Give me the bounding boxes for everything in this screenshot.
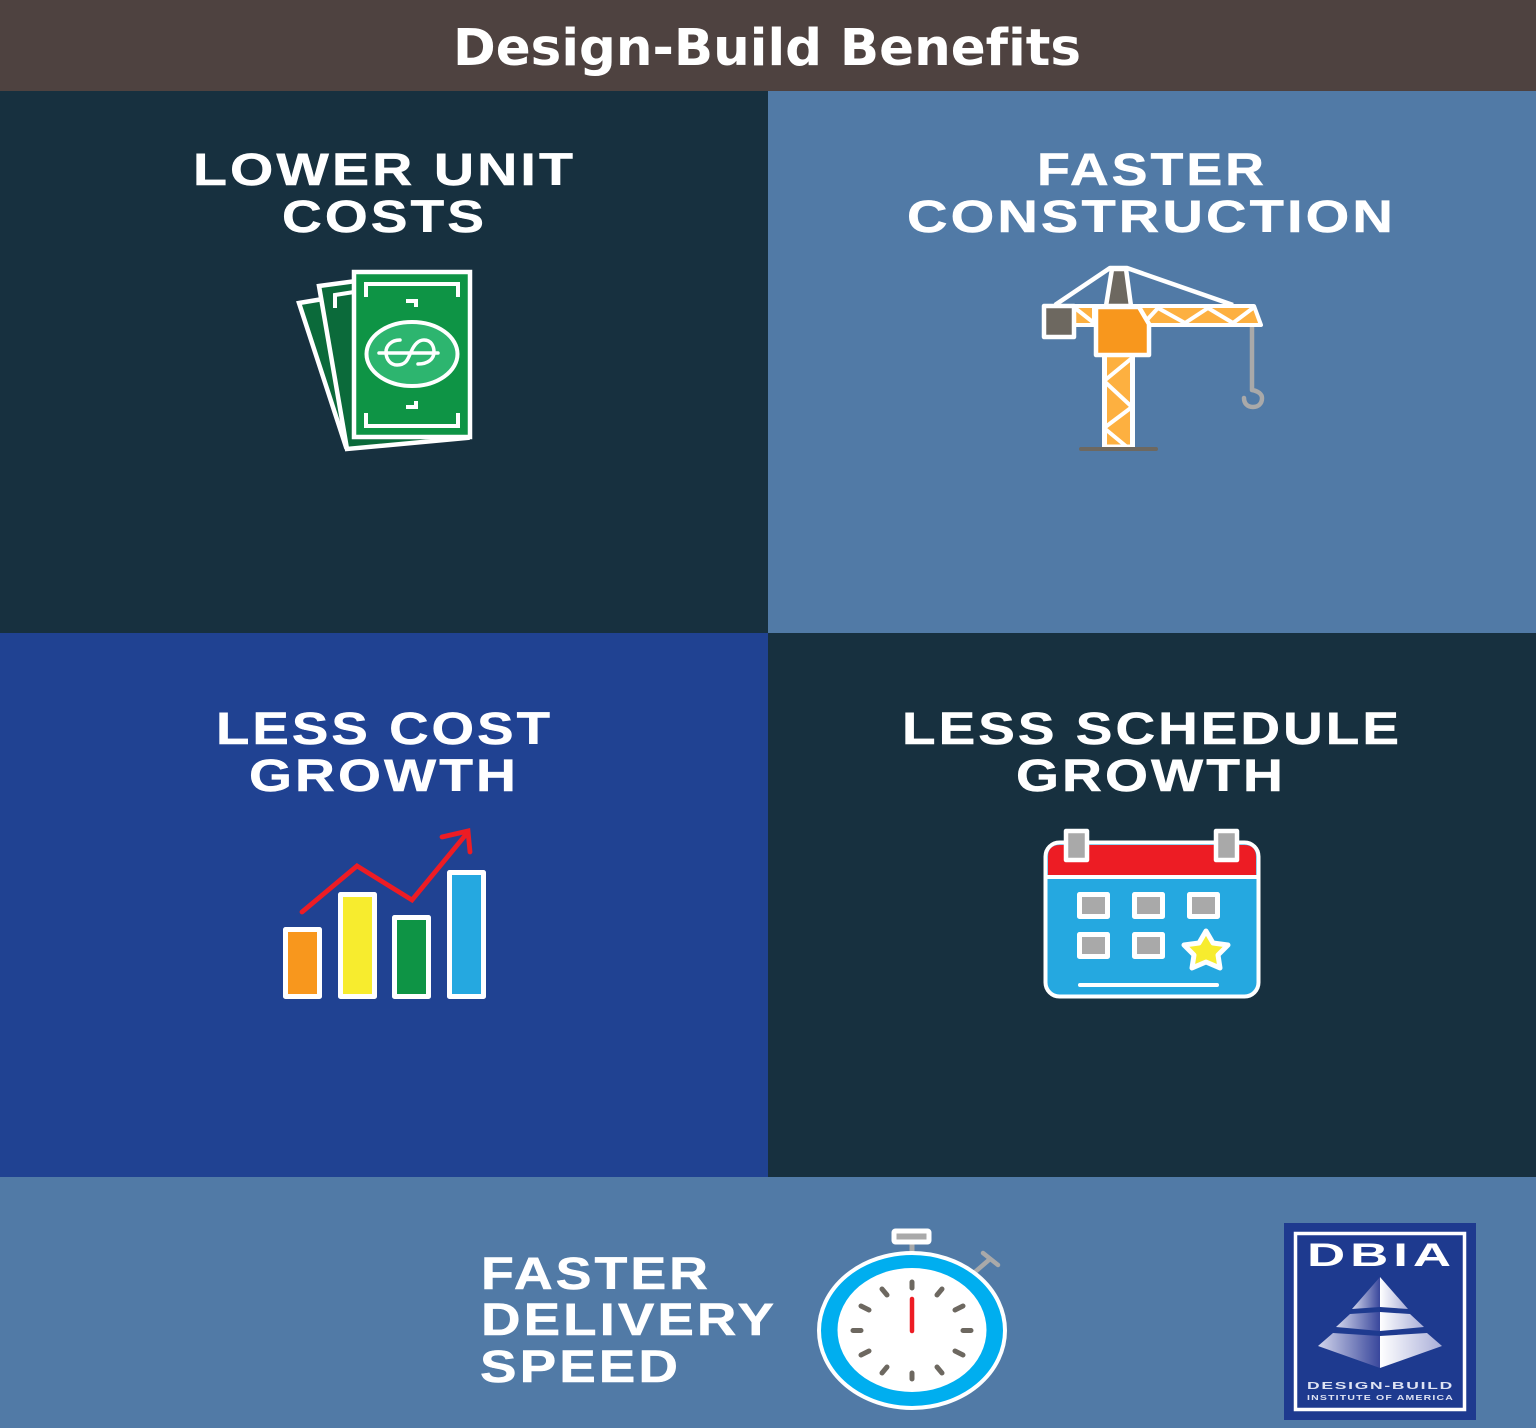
heading: less cost growth: GROWTH [249,750,519,801]
icon: calendar with star [1045,831,1259,996]
heading: lower unit costs [193,144,576,242]
panel: less schedule growth [768,633,1536,1177]
heading: less cost growth [216,703,553,801]
heading: lower unit costs: LOWER UNIT [193,144,576,195]
logo pyramid [1318,1277,1442,1368]
icon: rising bar chart [286,831,484,996]
title banner [0,0,1536,91]
heading: faster delivery speed [480,1248,777,1392]
panel: lower unit costs [0,91,768,633]
icon: tower crane [1044,268,1262,451]
heading: lower unit costs: COSTS [282,191,487,242]
logo name: DESIGN-BUILD [1307,1381,1454,1392]
heading: less schedule growth: LESS SCHEDULE [902,703,1402,754]
icon: stack of dollar bills [299,272,470,449]
panel: faster construction [768,91,1536,633]
heading: faster delivery speed: SPEED [480,1341,681,1392]
logo subtitle: INSTITUTE OF AMERICA [1307,1395,1454,1402]
icon: stopwatch [819,1231,1005,1408]
heading: less cost growth: LESS COST [216,703,553,754]
title: Design-Build Benefits [453,19,1081,78]
logo: DBIA [1284,1223,1476,1420]
heading: faster construction: CONSTRUCTION [907,191,1396,242]
panel: less cost growth [0,633,768,1177]
heading: faster construction: FASTER [1037,144,1267,195]
logo wordmark: DBIA [1307,1237,1456,1273]
heading: faster construction [907,144,1396,242]
heading: less schedule growth: GROWTH [1016,750,1286,801]
heading: faster delivery speed: DELIVERY [481,1294,777,1345]
heading: faster delivery speed: FASTER [481,1248,711,1299]
panel: faster delivery speed [0,1177,1536,1428]
heading: less schedule growth [902,703,1402,801]
